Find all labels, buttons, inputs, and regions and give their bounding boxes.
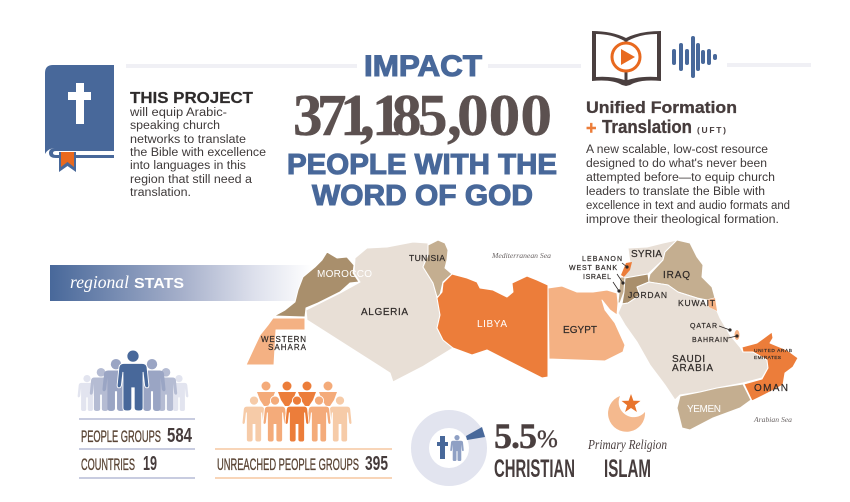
map labels: UNITED ARAB <box>754 348 792 354</box>
country: iraq <box>648 240 715 300</box>
map labels: BAHRAIN <box>692 337 728 344</box>
heading: people with the word of god: PEOPLE WITH THE <box>287 149 557 181</box>
banner: regional stats <box>50 265 312 301</box>
stat: unreached people groups <box>215 448 392 479</box>
stat: people groups: 584 <box>167 425 193 447</box>
text: this project: region that still need a <box>130 174 253 186</box>
text: this project: will equip Arabic- <box>129 107 227 119</box>
country: syria <box>623 240 677 278</box>
country: western sahara <box>246 318 305 365</box>
map leader lines <box>613 263 738 338</box>
map labels: ALGERIA <box>361 307 408 318</box>
chart: christian share donut <box>420 419 485 477</box>
icon: open book with play button <box>592 31 661 86</box>
stat: primary religion islam <box>587 438 667 483</box>
map labels: EMIRATES <box>754 355 781 361</box>
heading: people with the word of god: WORD OF GOD <box>312 180 533 212</box>
map labels: EGYPT <box>563 325 597 336</box>
stat: 5.5 percent christian: 5.5 <box>494 416 537 456</box>
text: unified formation + translation: + <box>586 118 597 138</box>
map labels: Mediterranean Sea <box>491 251 551 260</box>
stat: countries <box>79 453 195 479</box>
map labels: TUNISIA <box>409 253 445 263</box>
map labels: MOROCCO <box>317 269 372 280</box>
country: oman and uae <box>742 332 798 401</box>
country: qatar and bahrain <box>734 330 740 340</box>
icon: bible <box>45 65 114 172</box>
stat: primary religion islam: ISLAM <box>604 455 651 483</box>
map labels: KUWAIT <box>678 298 715 308</box>
text: unified formation + translation <box>586 98 790 226</box>
big number: 000 <box>457 82 552 148</box>
map labels: OMAN <box>754 383 788 394</box>
country: yemen <box>677 384 751 430</box>
icon: people group blue <box>78 350 188 411</box>
icon: audio waveform <box>674 38 715 76</box>
map labels: IRAQ <box>663 270 690 281</box>
map labels: ARABIA <box>672 363 713 374</box>
stat: 5.5 percent christian: % <box>537 426 558 453</box>
stat: unreached people groups: UNREACHED PEOPLE GROUPS <box>217 455 359 474</box>
country: saudi arabia <box>618 282 768 400</box>
stat: people groups: PEOPLE GROUPS <box>81 427 161 446</box>
country: egypt <box>548 286 625 361</box>
map labels: Arabian Sea <box>753 415 792 424</box>
text: this project: THIS PROJECT <box>130 90 254 107</box>
text: unified formation + translation: excellence in text and audio formats and <box>586 200 790 212</box>
text: this project: speaking church <box>130 120 220 132</box>
map labels: QATAR <box>690 323 717 330</box>
text: this project: translation. <box>130 187 191 199</box>
heading: impact: IMPACT <box>364 50 482 83</box>
map labels: SAHARA <box>268 343 307 352</box>
map labels: WESTERN <box>261 335 306 344</box>
big number: 371,185, <box>293 82 462 148</box>
stat: unreached people groups: 395 <box>365 453 388 475</box>
text: unified formation + translation: (UFT) <box>697 125 726 135</box>
map labels: SYRIA <box>631 249 662 260</box>
text: unified formation + translation: attempted before—to equip church <box>586 172 775 184</box>
country: israel and west bank <box>618 277 625 303</box>
banner: regional stats: regional <box>70 272 129 292</box>
text: unified formation + translation: designed to do what's never been <box>586 158 767 170</box>
country: libya <box>437 274 548 378</box>
icon: people group orange <box>242 382 352 442</box>
country: algeria <box>306 242 453 382</box>
big number <box>293 82 552 148</box>
country: kuwait <box>707 298 717 311</box>
stat: countries: COUNTRIES <box>81 455 135 474</box>
text: this project: networks to translate <box>130 134 246 146</box>
text: unified formation + translation: Unified Formation <box>586 98 737 117</box>
banner: regional stats: STATS <box>134 275 184 292</box>
map labels: ISRAEL <box>583 274 611 281</box>
map labels: WEST BANK <box>569 265 617 272</box>
stat: primary religion islam: Primary Religion <box>587 438 667 453</box>
text: unified formation + translation: A new scalable, low-cost resource <box>586 144 768 156</box>
country: jordan <box>622 274 649 304</box>
stat: people groups <box>79 418 195 450</box>
text: unified formation + translation: Translation <box>602 117 692 137</box>
country: tunisia <box>423 240 452 297</box>
stat: 5.5 percent christian <box>494 416 575 483</box>
text: this project <box>129 90 266 199</box>
country: lebanon <box>621 262 632 277</box>
map labels <box>261 249 792 424</box>
text: unified formation + translation: leaders to translate the Bible with <box>586 186 765 198</box>
stat: 5.5 percent christian: CHRISTIAN <box>494 455 575 483</box>
text: unified formation + translation: improve their theological formation. <box>586 214 779 226</box>
map labels: YEMEN <box>687 404 721 415</box>
icon: crescent and star <box>608 394 645 432</box>
map labels: LIBYA <box>477 319 507 330</box>
country: morocco <box>274 252 359 317</box>
heading: people with the word of god <box>287 149 557 212</box>
text: this project: into languages in this <box>130 160 246 172</box>
map labels: JORDAN <box>628 290 667 300</box>
map labels: LEBANON <box>582 256 622 263</box>
stat: countries: 19 <box>143 453 157 475</box>
map: north africa and middle east <box>246 240 798 430</box>
map labels: SAUDI <box>672 354 705 365</box>
text: this project: the Bible with excellence <box>130 147 266 159</box>
